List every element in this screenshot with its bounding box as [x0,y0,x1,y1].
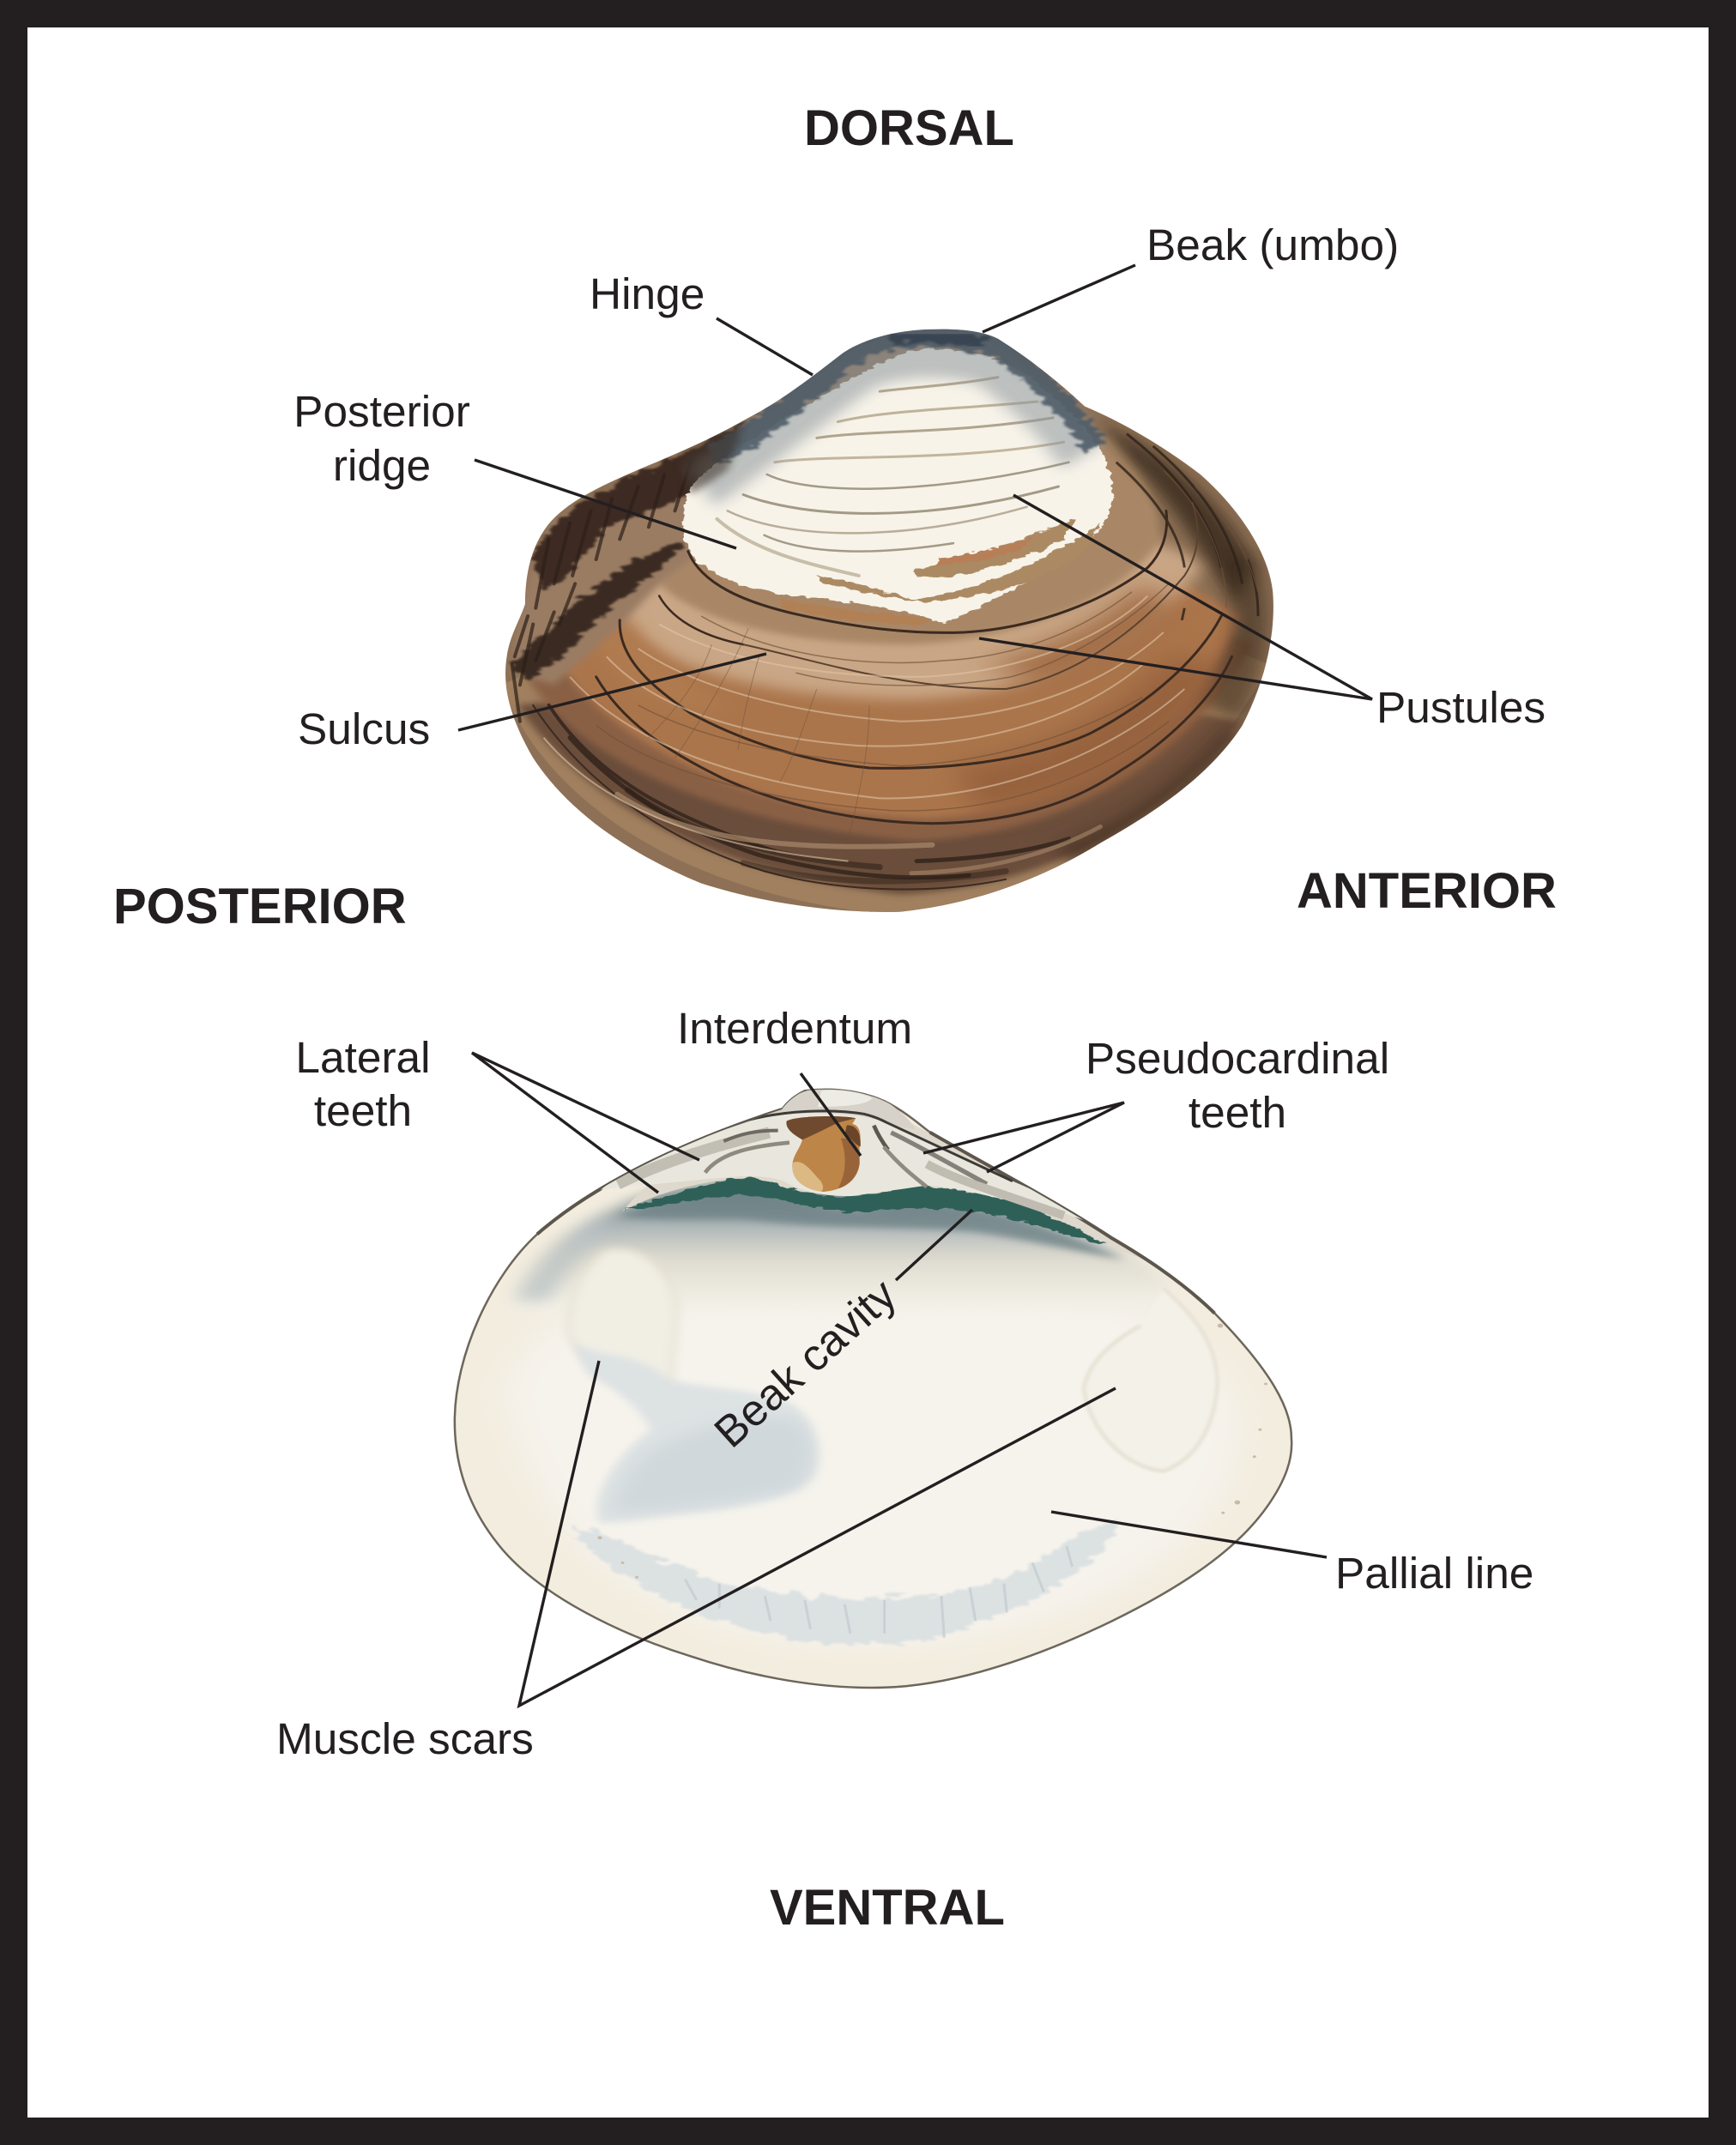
label: Hinge: Hinge [590,269,705,318]
label: Pallial line: Pallial line [1335,1548,1533,1598]
label: Muscle scars: Muscle scars [276,1713,534,1763]
label: Lateral teeth: Lateral [295,1032,431,1082]
arrow: sulcus leader [458,654,766,730]
left lateral tooth [705,1143,789,1173]
arrow: pustules leaders [979,495,1372,699]
arrow: lateral teeth leaders [472,1053,699,1193]
shell exterior colour bands [501,335,1268,915]
dark shading on hinge side [680,422,743,495]
pallial ribs [685,1546,1073,1638]
shell outer edge line [537,1109,1214,1314]
hinge white plate [601,1113,1094,1224]
label: Pseudocardinal teeth: Pseudocardinal [1086,1033,1389,1083]
label: Posterior ridge: ridge [333,440,431,490]
label: Beak (umbo): Beak (umbo) [1146,220,1399,269]
arrow: muscle scars leaders [519,1361,1116,1706]
grey shadow under green band [620,1198,1122,1261]
heading: dorsal: DORSAL [804,100,1014,156]
arrow: hinge leader [717,318,813,375]
heading: anterior: ANTERIOR [1297,863,1557,919]
tan streaks on lower umbo [780,519,1100,625]
umbo cap [749,1088,916,1129]
arrow: beak leader [983,265,1135,332]
label: Pustules: Pustules [1376,682,1545,732]
left blue side of wash [511,1234,591,1306]
growth streaks on umbo [717,378,1069,576]
arrow: beak cavity leader [896,1210,972,1280]
heading: ventral: VENTRAL [770,1880,1005,1936]
shell exterior outline [505,329,1273,912]
shell interior outline [455,1090,1291,1688]
fine growth lines [543,595,1184,861]
hatch strokes on posterior slope [512,462,691,722]
panel: exterior view of shell [501,329,1273,915]
label: Beak cavity: Beak cavity [705,1269,905,1457]
arrow: interdentum leader [801,1073,861,1156]
dark growth rings [533,503,1231,889]
interior washes and scars [503,1108,1267,1646]
blue-grey eroded beak [701,353,1082,486]
arrow: pallial line leader [1051,1512,1327,1557]
dark posterior slope [511,496,690,686]
label: Interdentum: Interdentum [677,1003,912,1053]
label: Lateral teeth: teeth [314,1085,412,1135]
right muscle scar [1084,1288,1218,1471]
panel: hinge teeth detail [601,1088,1094,1224]
left muscle scar [568,1249,677,1388]
arrow: posterior ridge leader [475,460,736,548]
outer edge dots [597,1324,1267,1579]
hinge line [641,1111,1013,1181]
blue-grey wash below hinge [541,1178,1157,1299]
pallial band [572,1517,1118,1644]
hinge plate [623,1108,1164,1267]
nacre green band [623,1177,1106,1245]
label: Sulcus: Sulcus [298,704,430,753]
anterior slope rings [1116,434,1258,620]
arrow: pseudocardinal leaders [923,1103,1124,1172]
blue grey base of scar [572,1342,818,1523]
tooth: interdentum brown [786,1116,861,1192]
label: Posterior ridge: Posterior [293,386,470,436]
right pseudocardinal ridges [874,1126,888,1150]
label: Pseudocardinal teeth: teeth [1189,1087,1286,1137]
dark anterior slope [1100,422,1253,608]
radial cross lines [649,628,869,839]
heading: posterior: POSTERIOR [113,879,407,934]
panel: interior view of shell [455,1090,1291,1688]
white umbo area [683,349,1113,624]
